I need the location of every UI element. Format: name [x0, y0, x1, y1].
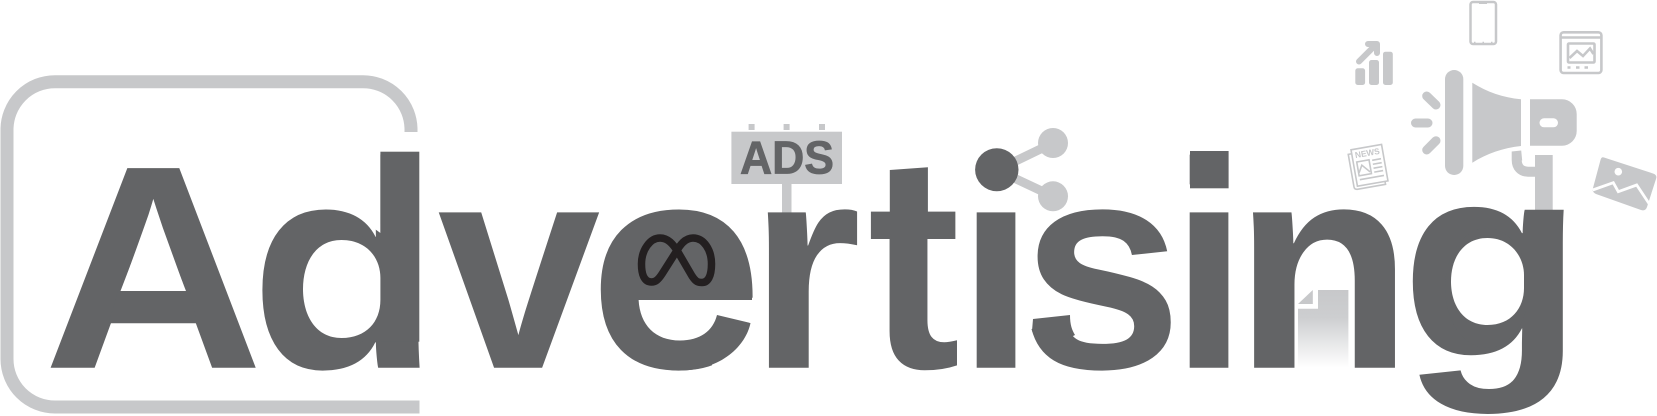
icon: ADS billboard: ADS [740, 131, 834, 183]
megaphone rear body [1530, 99, 1577, 146]
icon: tilted photo [1593, 157, 1656, 210]
icon: ADS billboard [731, 124, 842, 214]
meta logo inside e [642, 238, 712, 282]
icon: share network [997, 128, 1068, 211]
megaphone cone [1472, 83, 1521, 163]
icon: bar chart with rising arrow [1355, 44, 1393, 85]
megaphone sound rays [1416, 96, 1436, 150]
rounded frame bracket [7, 82, 420, 407]
letter g: g [1400, 107, 1584, 416]
megaphone bell rim [1445, 70, 1463, 175]
share node as dot of i [975, 148, 1018, 191]
wordmark: Advertising [50, 151, 1564, 414]
icon: smartphone [1470, 2, 1496, 44]
megaphone handle [1517, 155, 1553, 215]
icon: megaphone [1416, 70, 1577, 215]
icon: newspaper [1348, 144, 1388, 190]
icon: newspaper: NEWS [1354, 146, 1381, 160]
icon: document with gradient inside n [1298, 290, 1348, 368]
icon: browser window with graph [1561, 32, 1601, 73]
